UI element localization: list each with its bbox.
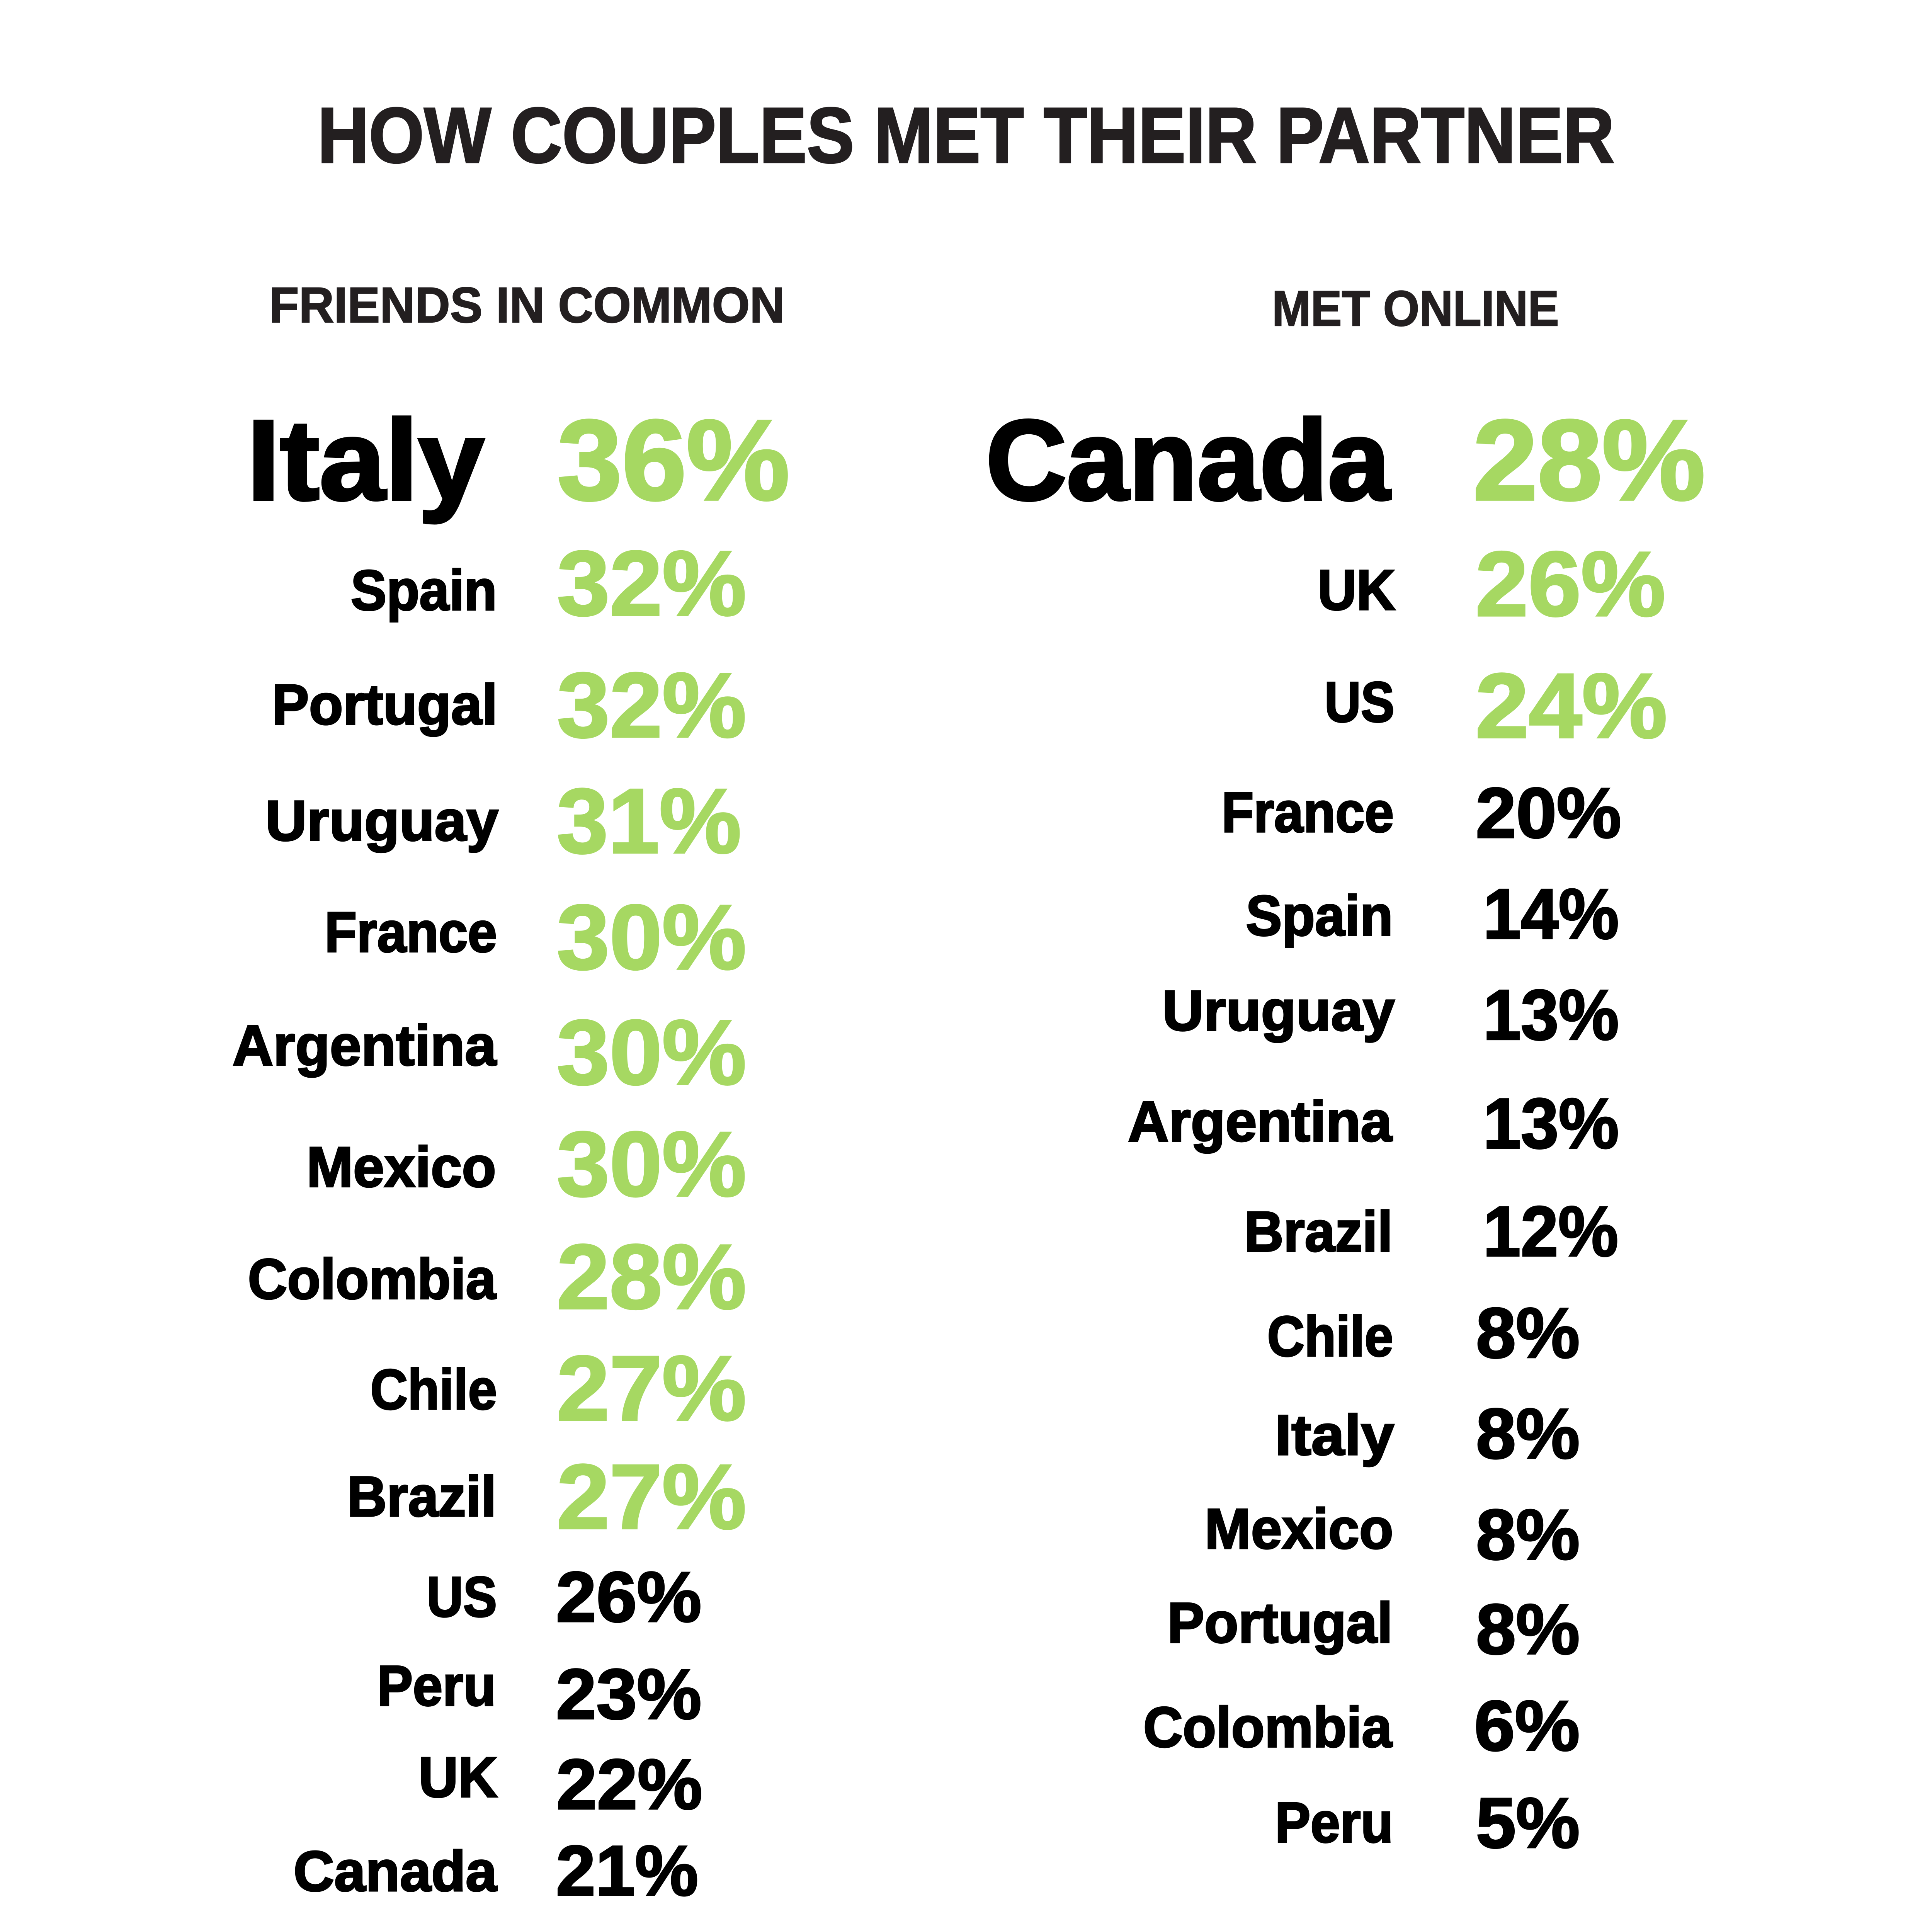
row: US 26%: 26% <box>556 1557 702 1637</box>
row: Spain 14% <box>1246 874 1619 954</box>
row: Chile 8% <box>1267 1293 1580 1372</box>
row: Portugal 32% <box>272 654 746 757</box>
row: UK 26%: UK <box>1318 559 1395 622</box>
row: Argentina 30%: 30% <box>557 1001 746 1104</box>
row: Chile 27% <box>370 1337 746 1439</box>
row: UK 22% <box>418 1744 702 1824</box>
row: US 24%: US <box>1325 671 1395 734</box>
row: UK 22%: UK <box>418 1746 498 1809</box>
row: France 20%: France <box>1221 781 1394 844</box>
row: France 30%: France <box>325 901 497 964</box>
row: Mexico 30%: 30% <box>557 1113 746 1215</box>
row: Mexico 30%: Mexico <box>306 1136 496 1199</box>
row: UK 26%: 26% <box>1475 533 1665 635</box>
row: Spain 32%: Spain <box>351 559 497 622</box>
row: Argentina 13% <box>1128 1083 1619 1163</box>
row: US 26%: US <box>427 1565 497 1629</box>
row: US 24% <box>1325 655 1667 757</box>
row: Colombia 6% <box>1143 1686 1580 1765</box>
row: Spain 32%: 32% <box>557 532 746 634</box>
row: Uruguay 13% <box>1162 975 1619 1054</box>
row: Colombia 28% <box>248 1226 746 1328</box>
row: Italy 36%: 36% <box>558 396 789 524</box>
row: Uruguay 13%: 13% <box>1483 975 1619 1054</box>
row: Peru 23% <box>377 1654 702 1734</box>
row: Portugal 32%: Portugal <box>272 673 498 736</box>
row: Italy 8%: Italy <box>1275 1404 1394 1467</box>
row: Italy 36% <box>247 396 789 524</box>
row: Chile 8%: 8% <box>1476 1293 1580 1372</box>
row: Canada 28%: 28% <box>1473 396 1705 524</box>
row: Brazil 27%: 27% <box>557 1446 746 1548</box>
row: Mexico 8% <box>1205 1495 1580 1574</box>
row: Brazil 12%: Brazil <box>1244 1200 1393 1264</box>
row: Portugal 32%: 32% <box>557 654 746 757</box>
row: Spain 14%: Spain <box>1246 884 1393 948</box>
row: Canada 28%: Canada <box>986 396 1391 524</box>
row: Peru 23%: 23% <box>556 1654 702 1734</box>
row: Mexico 8%: Mexico <box>1205 1497 1393 1561</box>
row: Peru 5%: 5% <box>1476 1783 1580 1863</box>
row: Colombia 6%: 6% <box>1474 1686 1580 1765</box>
row: Mexico 30% <box>306 1113 746 1215</box>
row: Portugal 8%: Portugal <box>1167 1591 1393 1655</box>
row: Brazil 12%: 12% <box>1483 1191 1618 1271</box>
row: Chile 27%: 27% <box>557 1337 746 1439</box>
panel: friends in common <box>233 277 789 1910</box>
row: Colombia 28%: Colombia <box>248 1248 497 1311</box>
row: Canada 21% <box>294 1831 698 1910</box>
title: HOW COUPLES MET THEIR PARTNER <box>318 92 1614 179</box>
row: Mexico 8%: 8% <box>1476 1495 1580 1574</box>
row: France 20%: 20% <box>1476 773 1621 853</box>
row: Peru 23%: Peru <box>377 1654 496 1718</box>
row: Brazil 12% <box>1244 1191 1618 1271</box>
row: Uruguay 31%: 31% <box>557 770 741 872</box>
row: Argentina 30%: Argentina <box>233 1014 497 1077</box>
row: Spain 32% <box>351 532 746 634</box>
row: Canada 21%: 21% <box>556 1831 698 1910</box>
heading: friends in common: FRIENDS IN COMMON <box>269 277 785 333</box>
row: Spain 14%: 14% <box>1483 874 1619 954</box>
row: Argentina 13%: Argentina <box>1128 1090 1393 1153</box>
row: France 30% <box>325 886 746 988</box>
row: Argentina 13%: 13% <box>1483 1083 1619 1163</box>
row: France 30%: 30% <box>557 886 746 988</box>
row: Peru 5% <box>1275 1783 1580 1863</box>
row: Uruguay 13%: Uruguay <box>1162 979 1395 1043</box>
row: Portugal 8% <box>1167 1589 1580 1669</box>
row: Italy 8% <box>1275 1394 1580 1473</box>
row: France 20% <box>1221 773 1621 853</box>
row: Portugal 8%: 8% <box>1476 1589 1580 1669</box>
row: Chile 8%: Chile <box>1267 1305 1393 1368</box>
row: Colombia 6%: Colombia <box>1143 1696 1393 1759</box>
row: Brazil 27% <box>347 1446 746 1548</box>
row: Peru 5%: Peru <box>1275 1791 1393 1854</box>
row: US 26% <box>427 1557 702 1637</box>
panel: met online <box>986 280 1705 1863</box>
row: Uruguay 31%: Uruguay <box>265 789 498 853</box>
row: UK 22%: 22% <box>556 1744 702 1824</box>
row: Colombia 28%: 28% <box>557 1226 746 1328</box>
row: Uruguay 31% <box>265 770 741 872</box>
row: Canada 21%: Canada <box>294 1840 498 1903</box>
row: Chile 27%: Chile <box>370 1358 497 1422</box>
row: Italy 8%: 8% <box>1476 1394 1580 1473</box>
row: Canada 28% <box>986 396 1705 524</box>
row: US 24%: 24% <box>1475 655 1667 757</box>
row: Italy 36%: Italy <box>247 396 485 524</box>
row: UK 26% <box>1318 533 1665 635</box>
heading: met online: MET ONLINE <box>1272 280 1559 337</box>
row: Argentina 30% <box>233 1001 746 1104</box>
row: Brazil 27%: Brazil <box>347 1465 497 1529</box>
